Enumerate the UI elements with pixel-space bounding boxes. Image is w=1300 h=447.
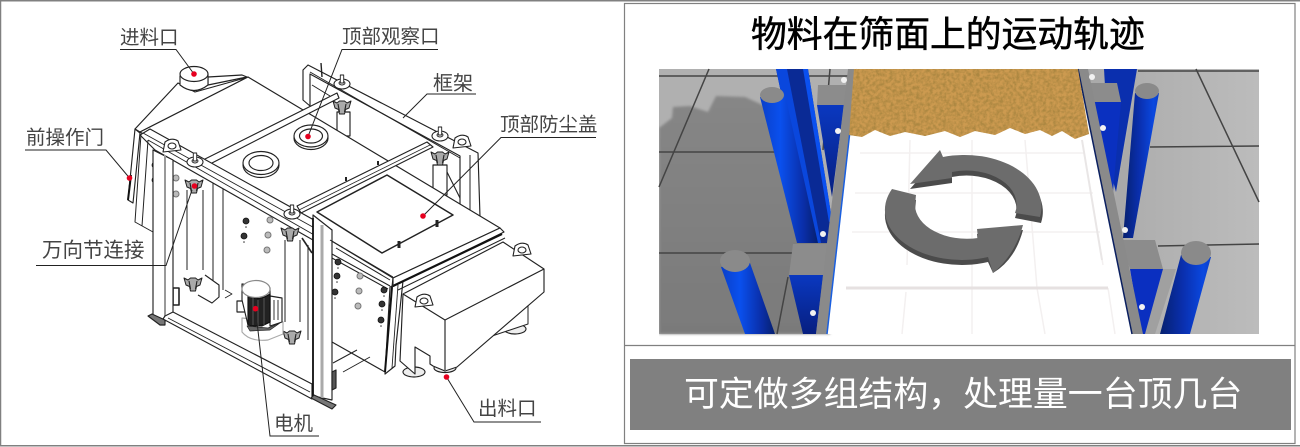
deck grid [846,140,1115,334]
side panel and hopper body [332,254,390,374]
back frame [303,63,480,217]
front right leg [302,215,336,409]
cross bars [203,93,433,213]
front door [128,129,153,232]
rear joints [333,101,449,165]
lugs and studs [163,75,471,219]
right floor [1078,69,1259,334]
label: front access door: 前操作门 [26,127,104,149]
cover flange [330,228,505,290]
left back interior [153,145,318,370]
label: frame: 框架 [433,72,473,95]
upper and lower joints [184,180,301,344]
left floor [655,65,854,338]
top arrow [910,150,1043,223]
hopper hood [135,66,248,132]
label: feed inlet: 进料口 [120,27,179,49]
bottom arrow [885,189,1023,273]
sand layer [845,69,1095,141]
label: top dust cover [420,114,598,219]
divider [625,344,1295,346]
rear shafts [337,112,447,195]
label: front access door [25,127,132,181]
label: universal joint connection: 万向节连接 [42,239,144,262]
title: 物料在筛面上的运动轨迹 [751,14,1145,54]
panel bolts [152,162,273,253]
label: discharge outlet: 出料口 [478,398,537,420]
screen deck [827,69,1132,334]
side rails [816,69,1143,334]
label: top dust cover: 顶部防尘盖 [500,114,598,136]
side panel bolts [332,259,387,327]
top cover surface [140,77,500,278]
front beam [140,129,332,240]
front bottom beam [163,312,312,399]
discharge hopper [400,242,544,374]
caption banner: 可定做多组结构，处理量一台顶几台 [684,375,1242,414]
label: top observation port: 顶部观察口 [342,26,440,48]
machine line drawing [128,63,544,409]
discharge lugs [415,243,531,307]
left blue columns [720,69,850,334]
caption banner [630,359,1291,430]
circular motion arrows [885,150,1043,273]
bolts on rails [810,74,1145,316]
discharge door strip [385,281,403,374]
motor [237,280,283,340]
label: universal joint connection [36,183,197,266]
right blue columns [1088,69,1211,334]
discharge feet [403,324,526,377]
label: motor: 电机 [274,413,314,435]
label: frame [403,72,476,118]
inspection rings [243,125,328,178]
front left leg [148,150,173,325]
label: feed inlet [120,27,197,77]
rail edge lines [827,69,1132,334]
dust cover lid [317,175,453,253]
panel: material motion on screen [624,4,1295,444]
panel: machine structure diagram [25,26,598,436]
3D render of vibrating screen [655,65,1259,338]
panel frame [624,4,1295,444]
label: top observation port [305,26,440,139]
label: discharge outlet [444,374,541,422]
label: motor [253,306,319,436]
